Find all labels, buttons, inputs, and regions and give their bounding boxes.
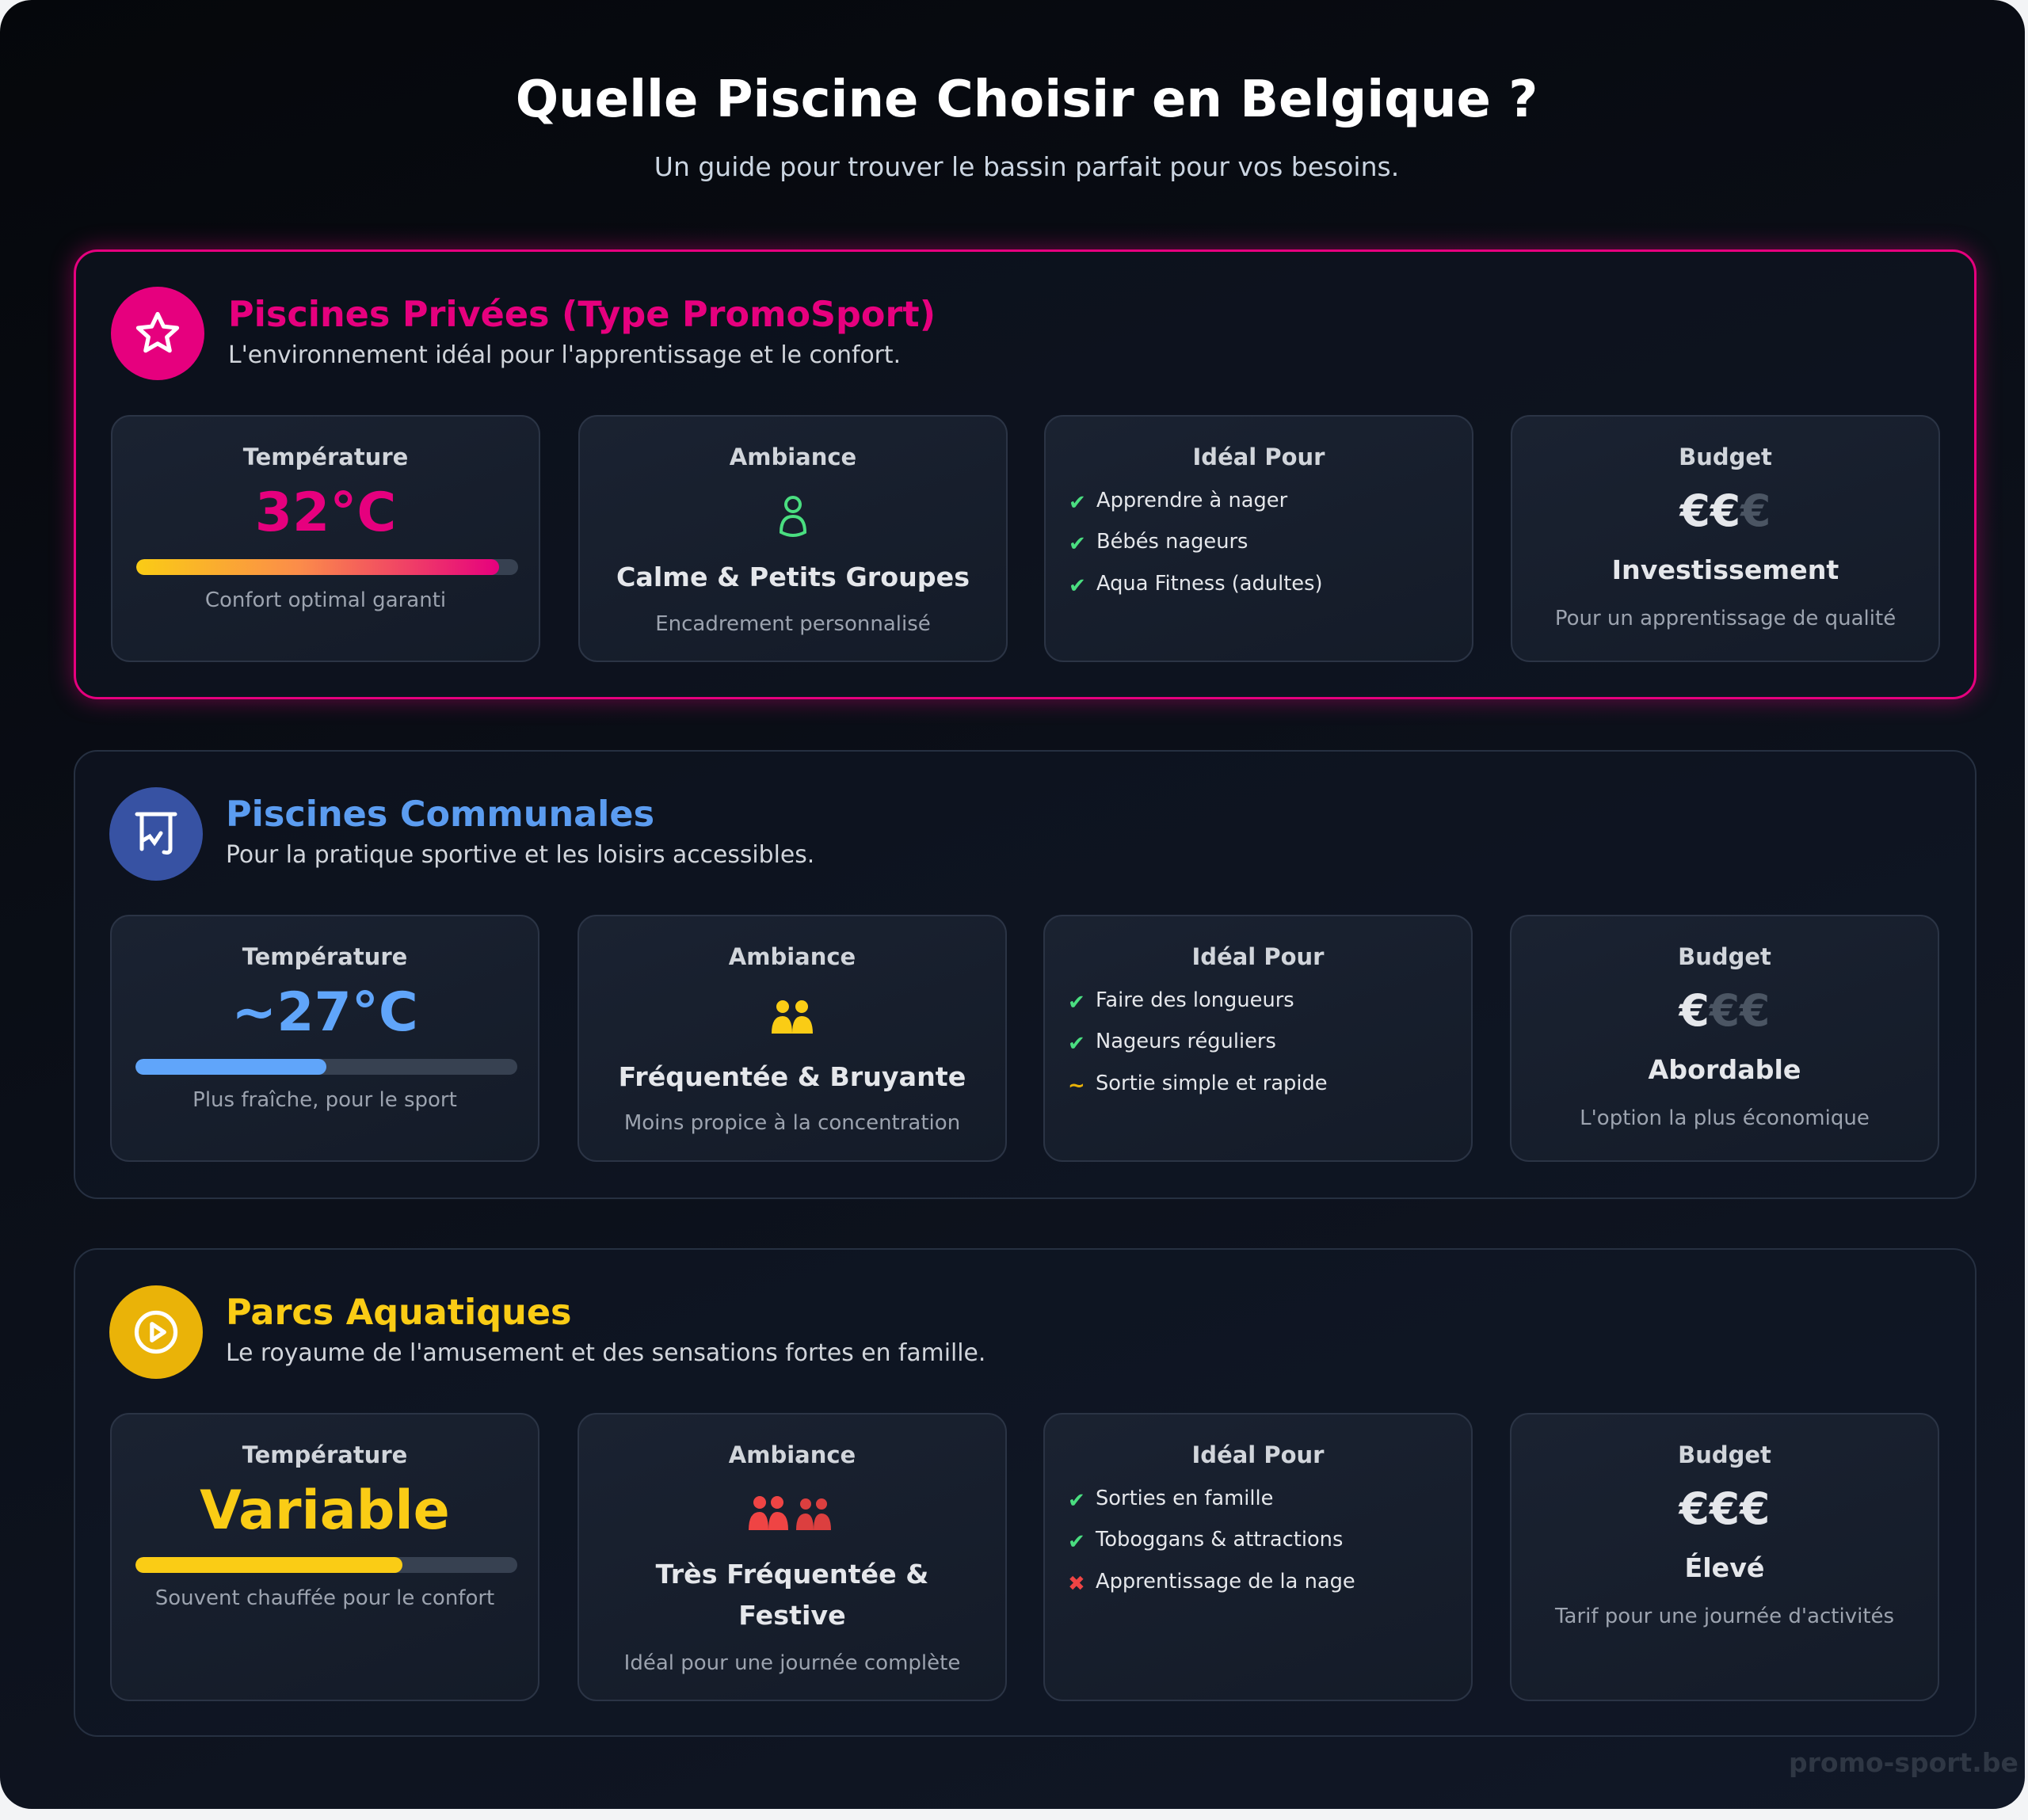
description: L'environnement idéal pour l'apprentissage et le confort. (228, 341, 901, 369)
description: Le royaume de l'amusement et des sensations fortes en famille. (226, 1339, 985, 1367)
card: température (110, 915, 539, 1162)
card: budget: €€€ (1679, 985, 1770, 1036)
card: température: Température (243, 444, 408, 470)
card: budget (1511, 415, 1940, 662)
card: idéal pour: ✔ (1068, 1032, 1085, 1056)
card: idéal pour: Sorties en famille (1096, 1487, 1273, 1510)
card: idéal pour: ✖ (1068, 1572, 1085, 1596)
description: Pour la pratique sportive et les loisirs accessibles. (226, 841, 814, 869)
card: budget: Budget (1678, 1441, 1771, 1468)
card: température: Variable (200, 1479, 450, 1542)
card: idéal pour: Idéal Pour (1192, 1441, 1324, 1468)
panel: piscines communales (74, 750, 1977, 1199)
card: budget: Tarif pour une journée d'activités (1555, 1605, 1894, 1628)
card: budget: Budget (1678, 943, 1771, 970)
card: ambiance: Encadrement personnalisé (655, 612, 931, 636)
card: budget: Abordable (1648, 1054, 1801, 1085)
watermark: promo-sport.be (1789, 1747, 2018, 1778)
heading: Piscines Privées (Type PromoSport) (228, 295, 936, 335)
card: ambiance: Ambiance (729, 1441, 856, 1468)
icon: person (780, 496, 806, 537)
card: budget: Élevé (1684, 1552, 1765, 1583)
card: idéal pour: ✔ (1068, 1489, 1085, 1513)
card: température: 32°C (255, 482, 396, 544)
card: température: Température (242, 1441, 407, 1468)
card: idéal pour: Apprentissage de la nage (1096, 1570, 1355, 1593)
card: ambiance: Très Fréquentée & (656, 1559, 928, 1590)
card: budget: Budget (1679, 444, 1772, 470)
card: budget: €€€ (1679, 1483, 1770, 1534)
card: idéal pour: Apprendre à nager (1096, 489, 1287, 512)
card: idéal pour: Idéal Pour (1193, 444, 1325, 470)
card: température: Plus fraîche, pour le sport (193, 1088, 457, 1112)
card: température (111, 415, 540, 662)
title: Quelle Piscine Choisir en Belgique ? (516, 70, 1538, 129)
card: idéal pour (1044, 415, 1473, 662)
heading: Parcs Aquatiques (226, 1293, 571, 1333)
card: idéal pour: Aqua Fitness (adultes) (1096, 572, 1323, 596)
card: budget (1510, 915, 1939, 1162)
card: idéal pour: ✔ (1068, 1530, 1085, 1554)
panel: parcs aquatiques (74, 1248, 1977, 1737)
card: ambiance (578, 415, 1008, 662)
panel: piscines privées (74, 249, 1977, 699)
card: ambiance (578, 1413, 1007, 1701)
card: température: Confort optimal garanti (205, 588, 446, 612)
card: budget: Investissement (1612, 554, 1839, 585)
icon: group (772, 1000, 813, 1034)
icon: play (109, 1285, 203, 1379)
card: température: Souvent chauffée pour le confort (155, 1586, 494, 1610)
card: idéal pour: Nageurs réguliers (1096, 1030, 1276, 1053)
card: ambiance: Festive (738, 1600, 846, 1631)
card: idéal pour: ✔ (1068, 991, 1085, 1015)
card: ambiance: Ambiance (729, 943, 856, 970)
card: ambiance: Moins propice à la concentration (624, 1111, 960, 1135)
card: budget: €€€ (1680, 485, 1771, 536)
card: idéal pour: Faire des longueurs (1096, 988, 1294, 1012)
card: idéal pour (1043, 1413, 1473, 1701)
icon: crowds (749, 1496, 831, 1530)
card: idéal pour: ~ (1068, 1074, 1085, 1098)
card: budget (1510, 1413, 1939, 1701)
subtitle: Un guide pour trouver le bassin parfait pour vos besoins. (654, 151, 1399, 182)
card: température: ~27°C (231, 981, 418, 1044)
card: ambiance (578, 915, 1007, 1162)
heading: Piscines Communales (226, 794, 654, 835)
card: ambiance: Fréquentée & Bruyante (619, 1061, 966, 1092)
card: idéal pour: ✔ (1069, 491, 1086, 515)
card: ambiance: Calme & Petits Groupes (616, 562, 970, 592)
card: ambiance: Idéal pour une journée complète (624, 1651, 960, 1675)
card: idéal pour (1043, 915, 1473, 1162)
card: idéal pour: Idéal Pour (1192, 943, 1324, 970)
card: température: Température (242, 943, 407, 970)
card: idéal pour: ✔ (1069, 574, 1086, 598)
icon: pool ladder (109, 787, 203, 881)
card: ambiance: Ambiance (730, 444, 856, 470)
card: budget: Pour un apprentissage de qualité (1555, 607, 1896, 630)
icon: star (111, 287, 204, 380)
card: idéal pour: Bébés nageurs (1096, 530, 1248, 554)
card: température (110, 1413, 539, 1701)
card: idéal pour: ✔ (1069, 532, 1086, 556)
card: idéal pour: Sortie simple et rapide (1096, 1072, 1328, 1095)
card: budget: L'option la plus économique (1580, 1106, 1870, 1130)
card: idéal pour: Toboggans & attractions (1096, 1528, 1343, 1552)
